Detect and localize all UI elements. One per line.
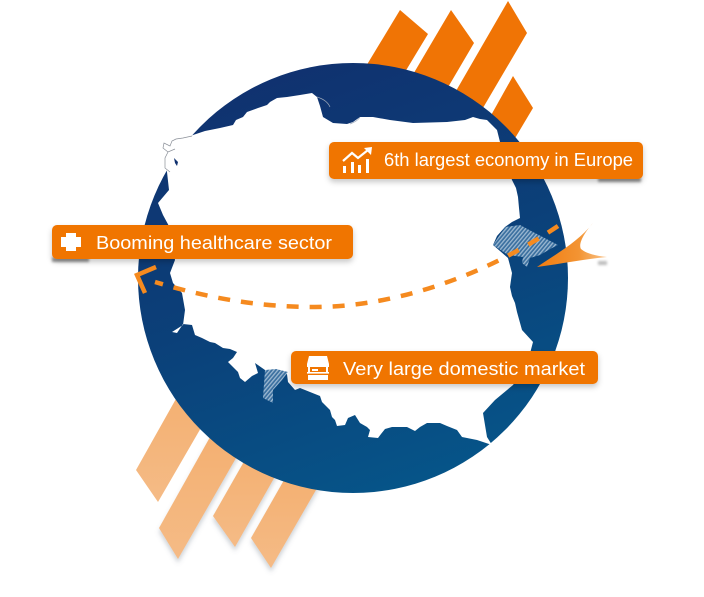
label box <box>329 142 643 179</box>
label box <box>52 225 353 259</box>
label box <box>291 351 598 384</box>
arrow head <box>137 267 156 293</box>
orange dart shadow <box>598 261 607 265</box>
orange dart <box>537 223 607 267</box>
label shadow artifact <box>52 257 89 262</box>
label: market <box>291 351 598 384</box>
north-west coast outline <box>163 136 192 172</box>
country shape <box>158 93 533 445</box>
lagoon <box>174 158 178 166</box>
label text: Very large domestic market <box>343 359 585 379</box>
dashed flight path <box>155 226 558 307</box>
hatched region east <box>493 225 558 267</box>
hatched region south <box>263 369 288 403</box>
upper orange stripes <box>342 1 533 155</box>
lower pale orange stripes <box>136 365 335 568</box>
globe circle <box>138 63 568 493</box>
label: healthcare <box>52 225 353 262</box>
label text: 6th largest economy in Europe <box>384 150 633 170</box>
icon: medical cross <box>61 233 81 251</box>
icon: market stall <box>307 356 329 380</box>
map of Poland <box>158 93 533 445</box>
label: economy <box>329 142 643 182</box>
icon: growth chart <box>343 147 372 173</box>
label text: Booming healthcare sector <box>96 233 332 253</box>
northern coast line <box>317 97 360 124</box>
label shadow artifact <box>598 177 641 182</box>
